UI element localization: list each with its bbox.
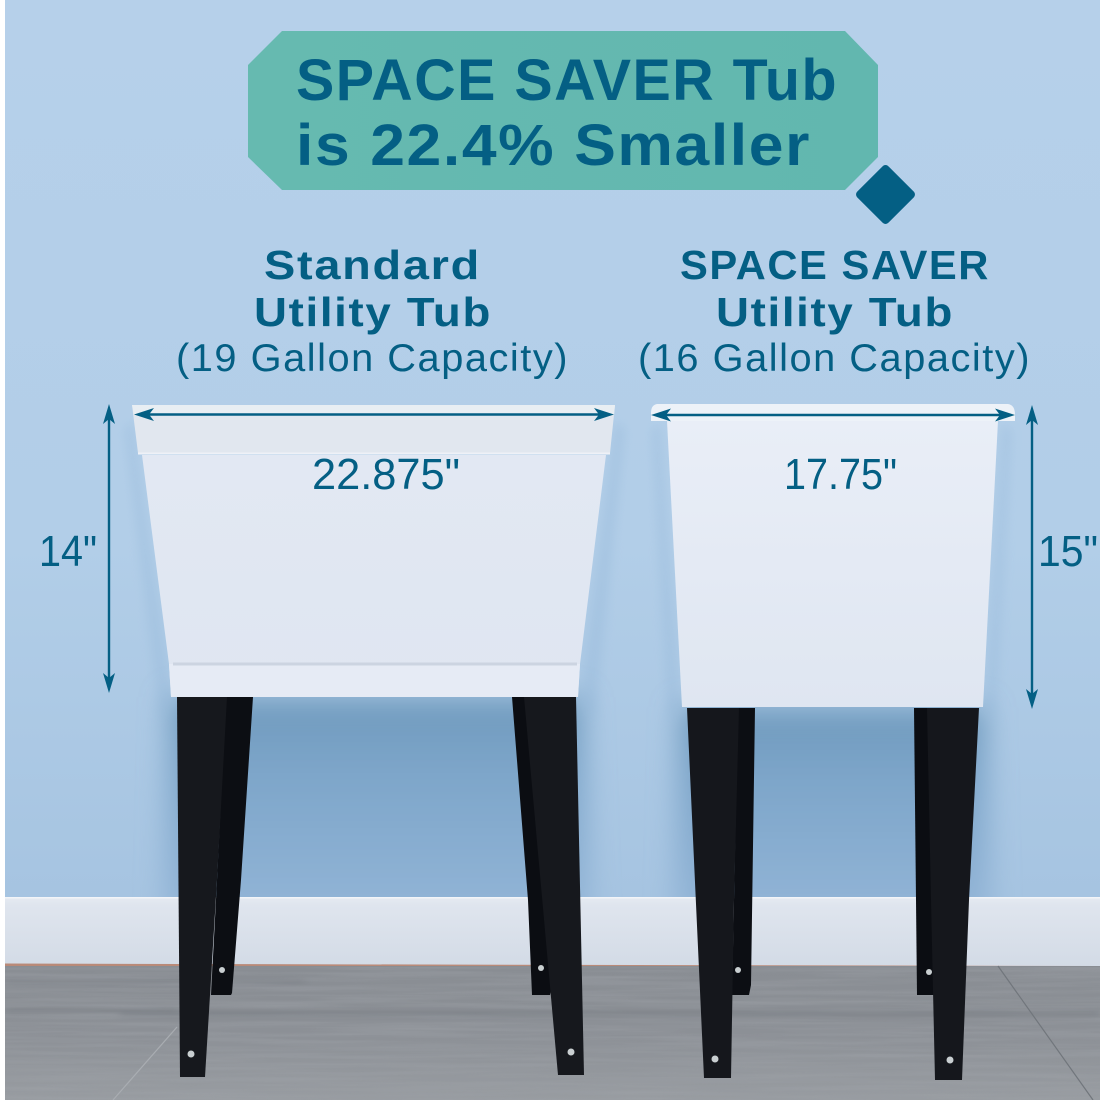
space saver tub legs (687, 708, 979, 1080)
icon: diamond accent (854, 163, 917, 226)
space saver tub basin (651, 404, 1015, 707)
floor: grey wood planks (5, 966, 1100, 1100)
bolts (712, 967, 954, 1064)
heading: standard tub (176, 242, 569, 380)
dimension: standard tub width: 22.875" (312, 450, 460, 499)
headline text: SPACE SAVER Tub (296, 48, 838, 113)
headline banner (248, 31, 878, 190)
heading: space saver tub: (16 Gallon Capacity) (638, 337, 1031, 380)
arrow: standard tub height (103, 404, 115, 693)
dimension: space saver tub width: 17.75" (784, 450, 897, 499)
headline text: is 22.4% Smaller (296, 113, 811, 178)
right back leg (512, 697, 551, 995)
heading: space saver tub (638, 242, 1031, 380)
headline text (296, 48, 838, 178)
left front leg (687, 708, 739, 1078)
standard tub legs (177, 697, 584, 1077)
baseboard (5, 897, 1100, 967)
arrow: space saver tub height (1026, 405, 1038, 709)
left back leg (732, 708, 755, 995)
left front leg (177, 697, 227, 1077)
right back leg (914, 708, 936, 995)
bolts (188, 965, 574, 1058)
right front leg (927, 708, 979, 1080)
heading: standard tub: (19 Gallon Capacity) (176, 337, 569, 380)
arrow: space saver tub width (651, 408, 1015, 422)
heading: space saver tub: Utility Tub (716, 289, 954, 335)
arrow: standard tub width (134, 408, 614, 421)
heading: space saver tub: SPACE SAVER (680, 242, 990, 288)
heading: standard tub: Utility Tub (254, 289, 492, 335)
heading: standard tub: Standard (264, 242, 481, 288)
right front leg (524, 697, 584, 1075)
left back leg (211, 697, 253, 995)
dimension: standard tub height: 14" (39, 527, 97, 576)
standard tub basin (132, 405, 615, 697)
